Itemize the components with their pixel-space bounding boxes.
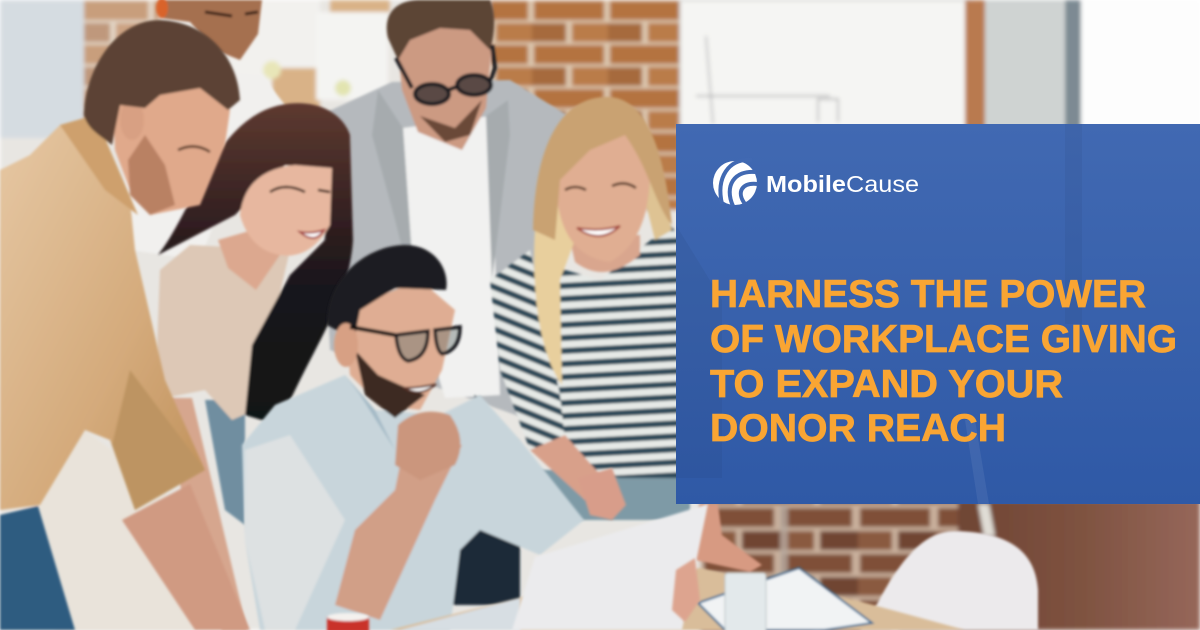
icon: globe swirl xyxy=(713,160,758,206)
photo: red mug xyxy=(327,613,369,630)
photo: laptop xyxy=(512,504,708,630)
photo: woman with striped top xyxy=(490,97,724,520)
photo: desk xyxy=(390,504,965,630)
panel: headline overlay xyxy=(676,124,1200,504)
photo: fingers on laptop edge xyxy=(672,558,700,622)
headline: HARNESS THE POWER xyxy=(710,273,1146,316)
panel background xyxy=(676,124,1200,504)
photo: woman with dark hair xyxy=(155,103,353,630)
photo: woman's lower body in white xyxy=(35,430,195,630)
headline: TO EXPAND YOUR xyxy=(710,363,1063,406)
photo: white chair xyxy=(860,531,1038,630)
headline xyxy=(710,273,1177,450)
faint photo showing through panel xyxy=(676,124,1082,504)
photo: man with tan shirt xyxy=(0,20,250,630)
headline: OF WORKPLACE GIVING xyxy=(710,318,1177,361)
logo wordmark: MobileCause xyxy=(766,171,919,197)
photo: back man xyxy=(120,0,285,260)
photo: man with grey blazer xyxy=(314,0,572,420)
headline: DONOR REACH xyxy=(710,407,1006,450)
logo: MobileCause xyxy=(713,160,919,206)
photo: seated man with glasses xyxy=(242,245,584,630)
photo: hand by laptop xyxy=(578,468,626,520)
